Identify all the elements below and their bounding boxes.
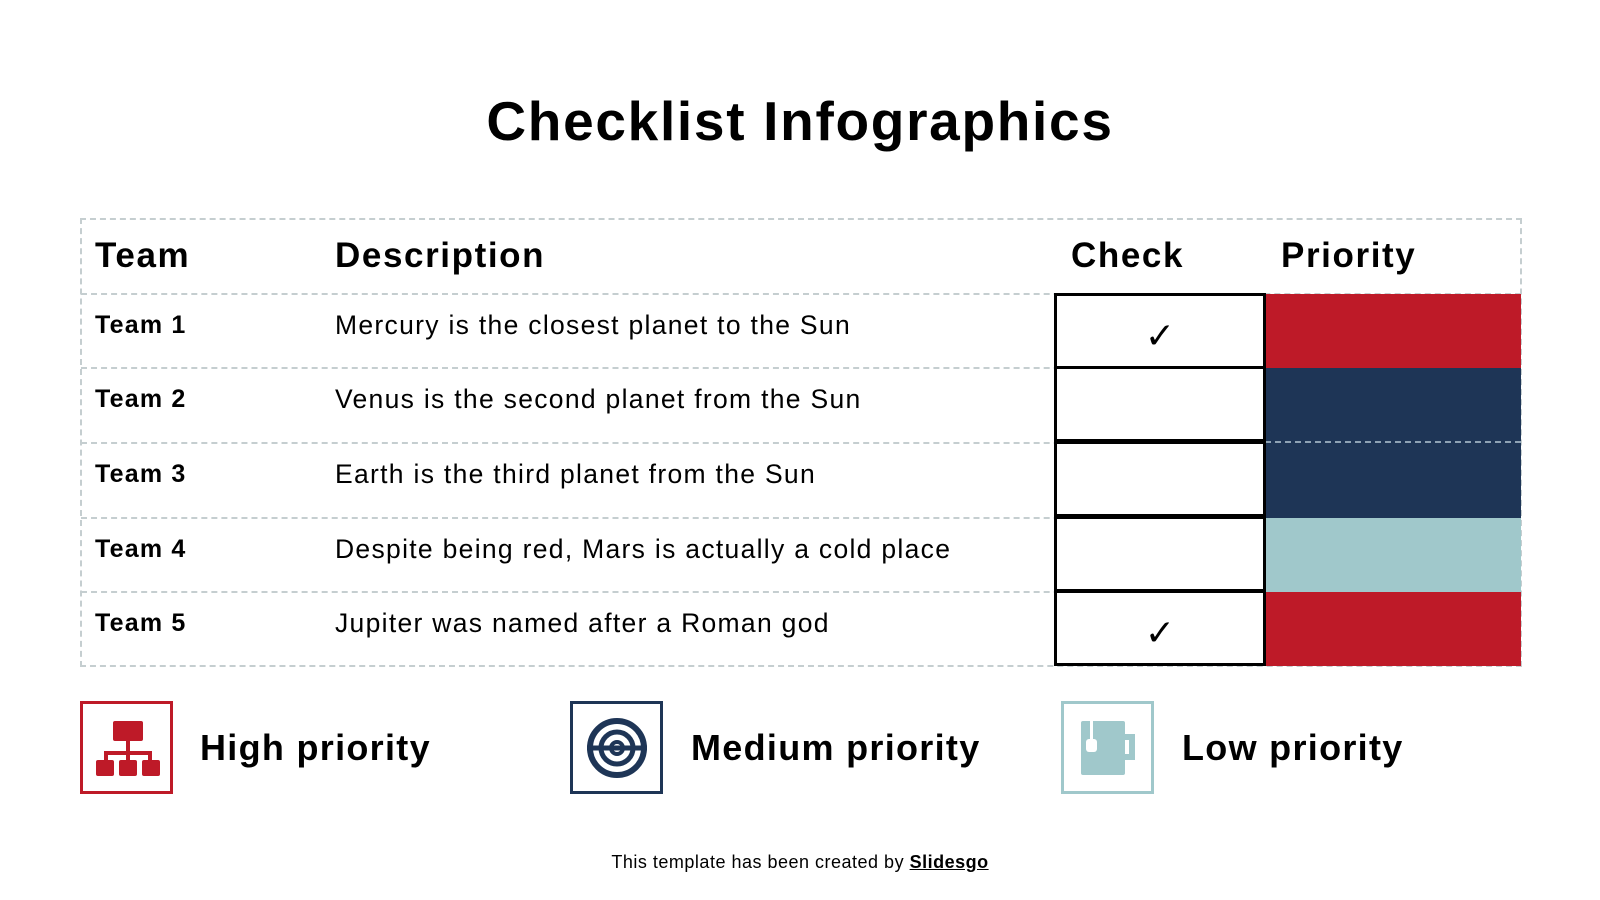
legend: medium priority icon [570,701,663,794]
header: Team: Team [95,236,190,275]
footer credit: This template has been created by Slidesgo [611,852,989,872]
check cell 3 [1054,441,1266,517]
priority cell 4 [1265,518,1521,593]
check cell 1 [1054,293,1266,369]
check cell 4 [1054,516,1266,592]
header: Description: Description [335,236,545,275]
priority cell 3 [1265,443,1521,518]
check cell 2 [1054,366,1266,442]
row 3 team: Team 3 [95,460,187,488]
check cell 5: ✓ [1145,612,1175,653]
row 5 team: Team 5 [95,609,187,637]
legend: low priority label: Low priority [1182,727,1404,768]
row 2 team: Team 2 [95,385,187,413]
legend: high priority label: High priority [200,727,431,768]
priority cell 1 [1265,294,1521,369]
title: Checklist Infographics [486,90,1114,152]
header: Priority: Priority [1281,236,1416,275]
row 2 description: Venus is the second planet from the Sun [335,384,862,414]
legend: low priority icon [1061,701,1154,794]
row 1 description: Mercury is the closest planet to the Sun [335,310,851,340]
check cell 5 [1054,590,1266,666]
table [80,218,1522,667]
row 4 description: Despite being red, Mars is actually a cold place [335,534,951,564]
row 5 description: Jupiter was named after a Roman god [335,608,830,638]
row 3 description: Earth is the third planet from the Sun [335,459,816,489]
priority cell 2 [1265,368,1521,443]
row 1 team: Team 1 [95,311,187,339]
header: Check: Check [1071,236,1184,275]
legend: high priority icon [80,701,173,794]
legend: medium priority label: Medium priority [691,727,981,768]
row 4 team: Team 4 [95,535,187,563]
check cell 1: ✓ [1145,315,1175,356]
priority cell 5 [1265,592,1521,666]
